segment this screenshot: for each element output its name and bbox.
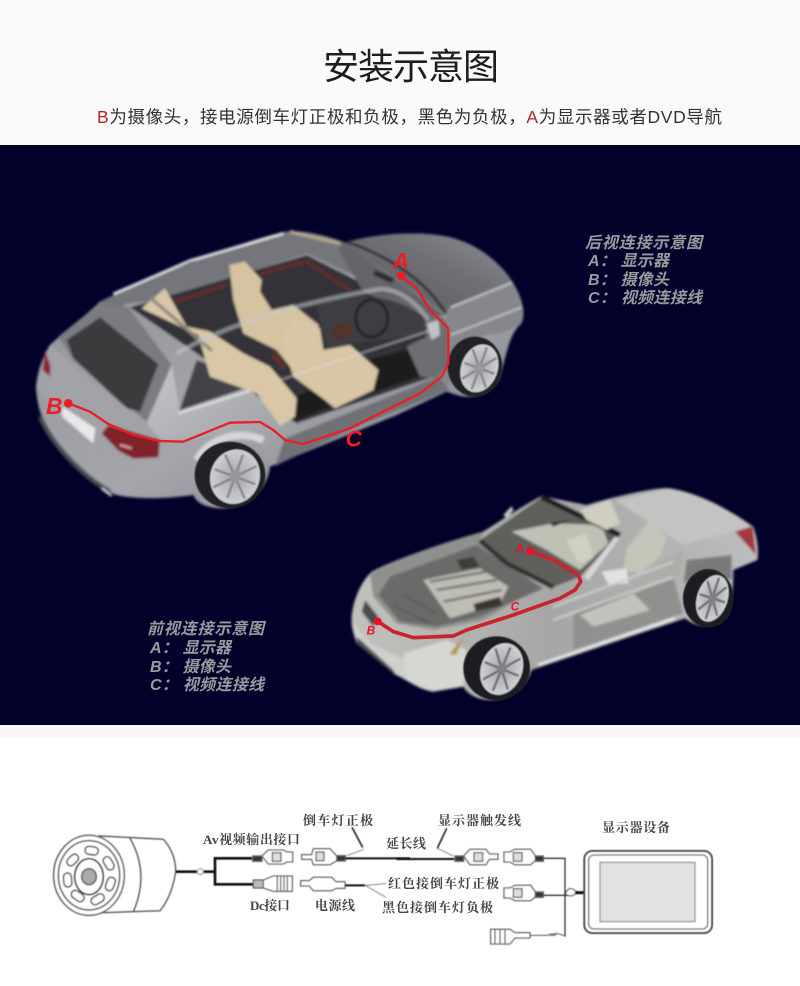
panel: dark navy background [0,145,800,725]
windshield [480,498,620,587]
label C: C [511,599,520,613]
leader lines [352,827,363,847]
point A [397,271,405,280]
legend: rear view: C： 视频连接线 [588,289,704,307]
door panel front [407,317,448,378]
front bumper [353,623,463,692]
translucent roof rail [177,289,428,353]
diagram labels: 显示器触发线 [438,813,521,828]
DC socket [253,876,292,891]
hood [370,532,540,630]
label A: A [392,248,409,274]
legend: front view: B： 摄像头 [150,658,232,676]
legend: rear view [585,234,705,307]
cabin interior [130,255,443,423]
legend: rear view: 后视连接示意图 [585,234,705,252]
near sill [275,377,449,466]
legend: front view: A： 显示器 [149,640,233,657]
AV socket [253,850,293,864]
front fender [438,283,523,387]
hood [345,234,512,314]
legend: front view: C： 视频连接线 [150,676,266,694]
legend: front view: 前视连接示意图 [147,620,267,638]
diagram labels: 电源线 [315,898,355,913]
label C: C [346,426,363,452]
number plate [62,407,95,443]
A pillar [583,537,619,581]
floor [293,348,423,422]
monitor cables [543,858,573,937]
wiring route [68,276,448,444]
AV plug [302,849,345,865]
windshield frame [541,497,620,535]
legend: rear view: B： 摄像头 [588,271,670,289]
engine [423,568,508,618]
point A [526,547,534,555]
header background [0,0,800,144]
exhaust [102,488,112,496]
rear suspension [683,555,732,583]
camera cable [176,858,253,884]
grille [362,600,378,627]
rear quarter panel [147,365,290,467]
trigger connector [455,849,498,865]
diagram labels: Av视频输出接口 [203,832,300,847]
wiring route [378,551,581,638]
door and sill [573,577,683,650]
tail light [735,526,756,555]
diagram labels: Dc接口 [250,898,290,913]
car body [352,488,758,700]
subtitle: wiring instructions: B为摄像头，接电源倒车灯正极和负极，黑色为负极，A为显示器或者DVD导航 [97,107,722,127]
rear side window [179,360,243,411]
title: 安装示意图 [323,46,499,87]
tail light [102,425,160,459]
rear deck [617,488,752,545]
rear wheel [195,442,268,511]
diagram labels: 红色接倒车灯正极 [388,876,499,891]
monitor connector 1 [504,849,543,865]
rear seat [142,288,297,426]
windshield [338,243,445,320]
diagram labels: 黑色接倒车灯负极 [382,900,493,915]
front wheel [448,337,505,398]
roof glass [100,231,380,317]
label A: A [514,541,524,555]
diagram labels: 延长线 [386,836,426,851]
tailgate frame [58,303,172,422]
side window light edge [178,391,250,413]
label B: B [367,623,376,637]
extension and power wires [345,858,410,885]
rear light left [43,350,51,377]
wiring diagram: right connectors and monitor [397,828,712,944]
extension wire [397,856,455,862]
rear window [67,317,158,412]
rear arch highlight [197,435,263,460]
rear-view car with wiring [36,231,523,511]
rear wheel [683,569,734,628]
camera front [54,835,124,915]
diagram labels [203,813,670,915]
front seats [512,523,608,570]
divider band under panel [0,725,800,737]
point B [64,399,73,408]
wiring diagram: camera and left connectors [54,827,410,915]
point B [374,617,382,625]
monitor [584,851,712,933]
label B: B [46,393,62,419]
legend: rear view: A： 显示器 [587,253,671,270]
tailgate lower [36,345,161,460]
front wheel [463,636,531,701]
power plug [301,877,345,891]
mirror [503,506,513,518]
engine bay [378,545,543,627]
legend: front view [147,620,267,694]
camera body [98,836,176,913]
power connector [491,929,530,944]
front seat near [282,317,378,408]
monitor screen [600,862,695,922]
sill highlight [538,618,675,665]
far door red trim [168,262,350,304]
car body [36,231,523,508]
front seat far [229,262,319,367]
dashboard [317,296,428,347]
front-view convertible car with wiring [352,488,758,701]
diagram labels: 倒车灯正极 [303,813,373,828]
amber marker [449,636,464,655]
monitor connector 2 [504,885,543,901]
far seats [580,499,620,530]
diagram labels: 显示器设备 [602,820,670,835]
